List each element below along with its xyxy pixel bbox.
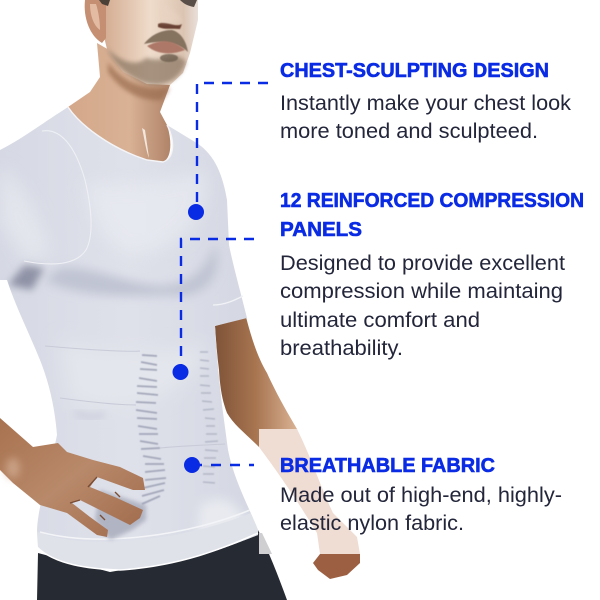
text: fabric description (280, 483, 562, 535)
compression ruching left (136, 355, 166, 504)
overlay panel over pants (259, 533, 272, 554)
lips (147, 41, 185, 53)
shirt shading (3, 180, 258, 550)
text: panels description: breathability. (280, 336, 403, 360)
nose side shade (160, 0, 182, 22)
neck shadow under jaw (108, 62, 170, 100)
face (103, 0, 198, 85)
chin patch (160, 54, 178, 62)
sleeve hem (213, 296, 243, 305)
fist (313, 554, 360, 579)
forearm faded by overlay (259, 429, 360, 554)
heading: reinforced compression panels (280, 189, 584, 241)
pants (37, 530, 287, 600)
man figure wearing compression shirt (0, 0, 360, 600)
heading: reinforced compression panels: PANELS (280, 218, 362, 241)
heading: breathable fabric: BREATHABLE FABRIC (280, 454, 495, 477)
text: chest description: Instantly make your chest look (280, 91, 571, 115)
wrist highlight (6, 458, 20, 478)
text: panels description: ultimate comfort and (280, 308, 480, 332)
nose shadow (158, 23, 182, 29)
beard stubble (107, 48, 186, 85)
finger creases (70, 477, 120, 520)
text: chest description: more toned and sculpteed. (280, 119, 538, 143)
hem white edge (37, 533, 258, 570)
heading: chest-sculpting design: CHEST-SCULPTING DESIGN (280, 59, 549, 82)
callout connector: chest (188, 83, 268, 220)
text: fabric description: Made out of high-end, highly- (280, 483, 562, 507)
neck highlight (142, 128, 149, 158)
text: panels description: Designed to provide excellent (280, 251, 565, 275)
ear inner (90, 4, 100, 30)
shoulder seam (24, 131, 91, 264)
eye (180, 0, 197, 7)
shadow under hand (95, 490, 146, 540)
compression ruching right (200, 352, 218, 483)
neck (68, 43, 170, 162)
ear (85, 0, 106, 43)
right arm (215, 317, 297, 447)
text: panels description (280, 251, 565, 360)
text: fabric description: elastic nylon fabric. (280, 511, 464, 535)
collar edge (68, 107, 173, 162)
text: panels description: compression while maintaing (280, 279, 563, 303)
moustache (144, 30, 188, 52)
callout connector: fabric (184, 457, 254, 473)
panel seams (40, 346, 250, 539)
hair (99, 0, 110, 6)
heading: reinforced compression panels: 12 REINFORCED COMPRESSION (280, 189, 584, 212)
left arm and hand (0, 418, 145, 537)
callout connector: panels (172, 239, 254, 380)
shirt body (0, 107, 258, 570)
text: chest description (280, 91, 571, 143)
